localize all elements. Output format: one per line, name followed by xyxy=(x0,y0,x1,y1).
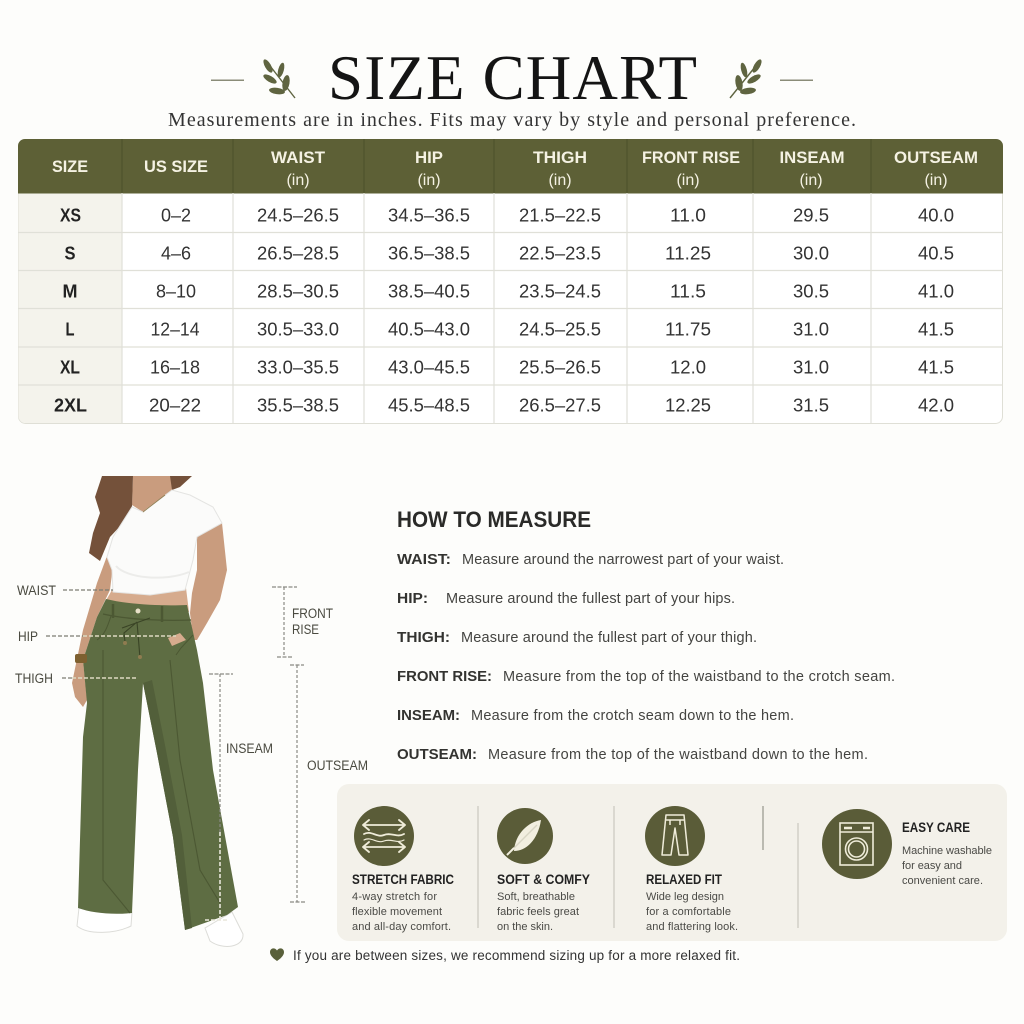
row 2XL: 45.5–48.5 xyxy=(388,396,470,416)
row XL: 25.5–26.5 xyxy=(519,358,601,378)
table header row: (in) xyxy=(676,172,700,189)
skin: neck xyxy=(132,476,173,512)
how to measure list xyxy=(397,551,895,763)
inseam bracket xyxy=(205,674,233,920)
table header row: OUTSEAM xyxy=(894,148,978,167)
row L: 24.5–25.5 xyxy=(519,320,601,340)
feature: easy care: Machine washable xyxy=(902,845,992,857)
row XS: 0–2 xyxy=(161,206,191,226)
decoration: right leaf sprig xyxy=(730,58,813,98)
row L: L xyxy=(66,320,74,340)
row XS: 21.5–22.5 xyxy=(519,206,601,226)
inseam instruction: INSEAM: xyxy=(397,707,460,724)
row S: 4–6 xyxy=(161,244,191,264)
row S: 30.0 xyxy=(793,244,829,264)
feature: relaxed fit: and flattering look. xyxy=(646,921,738,933)
row M xyxy=(62,282,954,302)
drawstring xyxy=(122,618,150,658)
table header row: HIP xyxy=(415,148,443,167)
title: SIZE CHART xyxy=(328,43,697,113)
row 2XL: 31.5 xyxy=(793,396,829,416)
feature: stretch fabric: 4-way stretch for xyxy=(352,891,437,903)
left shoe xyxy=(77,908,132,932)
pants xyxy=(78,599,238,930)
row XS: 34.5–36.5 xyxy=(388,206,470,226)
row XL xyxy=(60,358,954,378)
row 2XL: 12.25 xyxy=(665,396,711,416)
right shoe xyxy=(205,912,243,946)
table header row: INSEAM xyxy=(780,148,844,167)
feature: easy care: for easy and xyxy=(902,860,962,872)
row XL: 41.5 xyxy=(918,358,954,378)
row XS: 11.0 xyxy=(670,206,706,226)
row 2XL xyxy=(54,396,954,416)
feature: relaxed fit: RELAXED FIT xyxy=(646,872,723,887)
decoration: left leaf sprig xyxy=(211,58,295,98)
outseam instruction: Measure from the top of the waistband down to the hem. xyxy=(488,747,868,763)
row 2XL: 35.5–38.5 xyxy=(257,396,339,416)
row S: 40.5 xyxy=(918,244,954,264)
feature: easy care: convenient care. xyxy=(902,875,983,887)
feature: soft and comfy: Soft, breathable xyxy=(497,891,575,903)
table header row: THIGH xyxy=(533,148,587,167)
row L: 41.5 xyxy=(918,320,954,340)
feature: stretch fabric: and all-day comfort. xyxy=(352,921,451,933)
table header row: (in) xyxy=(286,172,310,189)
row M: 8–10 xyxy=(156,282,196,302)
row XS: 29.5 xyxy=(793,206,829,226)
feature: soft and comfy: SOFT & COMFY xyxy=(497,872,590,887)
feature: stretch fabric: STRETCH FABRIC xyxy=(352,872,454,887)
row 2XL: 2XL xyxy=(54,396,87,416)
row L: 12–14 xyxy=(150,320,200,340)
belt loops xyxy=(113,604,162,622)
row XL: 31.0 xyxy=(793,358,829,378)
model illustration wearing green wide-leg pants xyxy=(72,476,243,946)
row L: 31.0 xyxy=(793,320,829,340)
feature: relaxed fit xyxy=(645,806,738,933)
label: front rise: RISE xyxy=(292,622,319,637)
feature: soft and comfy: on the skin. xyxy=(497,921,553,933)
thigh instruction: THIGH: xyxy=(397,629,450,646)
label: waist: WAIST xyxy=(17,583,56,598)
row S: 36.5–38.5 xyxy=(388,244,470,264)
table header row: WAIST xyxy=(271,148,326,167)
hand in pocket xyxy=(168,633,186,646)
row M: 30.5 xyxy=(793,282,829,302)
outseam instruction: OUTSEAM: xyxy=(397,746,477,763)
row M: M xyxy=(62,282,78,302)
front rise instruction: Measure from the top of the waistband to the crotch seam. xyxy=(503,669,895,685)
row XL: 16–18 xyxy=(150,358,200,378)
row S: S xyxy=(64,244,76,264)
table header row: (in) xyxy=(548,172,572,189)
feature: relaxed fit: for a comfortable xyxy=(646,906,731,918)
row M: 38.5–40.5 xyxy=(388,282,470,302)
thigh instruction: Measure around the fullest part of your thigh. xyxy=(461,630,757,646)
label: outseam: OUTSEAM xyxy=(307,758,368,773)
label: inseam: INSEAM xyxy=(226,741,273,756)
front rise bracket xyxy=(272,587,297,657)
row S: 22.5–23.5 xyxy=(519,244,601,264)
outseam bracket xyxy=(290,665,305,902)
feature: relaxed fit: Wide leg design xyxy=(646,891,724,903)
panel: fabric features xyxy=(337,784,1007,941)
skin: midriff xyxy=(105,588,189,612)
feature: soft and comfy: fabric feels great xyxy=(497,906,579,918)
feature: easy care xyxy=(822,809,992,887)
hip instruction: Measure around the fullest part of your hips. xyxy=(446,591,735,607)
row XL: 43.0–45.5 xyxy=(388,358,470,378)
shirt xyxy=(107,490,222,595)
row XS: 40.0 xyxy=(918,206,954,226)
skin: right arm xyxy=(168,523,227,646)
row XL: XL xyxy=(60,358,80,378)
table header row: (in) xyxy=(417,172,441,189)
feature: easy care: EASY CARE xyxy=(902,820,970,835)
row L: 30.5–33.0 xyxy=(257,320,339,340)
row XS: XS xyxy=(60,206,81,226)
row L xyxy=(66,320,954,340)
table header row: US SIZE xyxy=(144,157,208,176)
table header row: SIZE xyxy=(52,157,88,176)
row XS xyxy=(60,206,954,226)
feature: stretch fabric xyxy=(352,806,454,933)
bracelets xyxy=(75,654,87,663)
front rise instruction: FRONT RISE: xyxy=(397,668,492,685)
row M: 23.5–24.5 xyxy=(519,282,601,302)
row 2XL: 26.5–27.5 xyxy=(519,396,601,416)
feature: soft and comfy xyxy=(497,808,590,933)
table header row: (in) xyxy=(924,172,948,189)
body measure guides xyxy=(46,590,176,678)
row M: 11.5 xyxy=(670,282,706,302)
hair xyxy=(89,476,192,561)
table header row: FRONT RISE xyxy=(642,148,740,167)
label: hip: HIP xyxy=(18,629,38,644)
label: front rise: FRONT xyxy=(292,606,333,621)
row S xyxy=(64,244,954,264)
how to measure heading: HOW TO MEASURE xyxy=(397,507,591,532)
row XL: 33.0–35.5 xyxy=(257,358,339,378)
row L: 11.75 xyxy=(665,320,711,340)
subtitle: Measurements are in inches. Fits may vary by style and personal preference. xyxy=(168,109,856,131)
label: front rise xyxy=(292,606,333,637)
footer note: If you are between sizes, we recommend sizing up for a more relaxed fit. xyxy=(293,948,740,963)
row S: 11.25 xyxy=(665,244,711,264)
label: thigh: THIGH xyxy=(15,671,53,686)
row S: 26.5–28.5 xyxy=(257,244,339,264)
table header row: (in) xyxy=(799,172,823,189)
waist instruction: WAIST: xyxy=(397,551,451,568)
necklace xyxy=(143,495,165,512)
inseam instruction: Measure from the crotch seam down to the hem. xyxy=(471,708,794,724)
waist instruction: Measure around the narrowest part of your waist. xyxy=(462,552,784,568)
row L: 40.5–43.0 xyxy=(388,320,470,340)
row XL: 12.0 xyxy=(670,358,706,378)
row M: 41.0 xyxy=(918,282,954,302)
hip instruction: HIP: xyxy=(397,590,428,607)
row XS: 24.5–26.5 xyxy=(257,206,339,226)
feature: stretch fabric: flexible movement xyxy=(352,906,442,918)
row 2XL: 20–22 xyxy=(149,396,201,416)
row 2XL: 42.0 xyxy=(918,396,954,416)
skin: left arm xyxy=(72,556,113,707)
size table xyxy=(18,139,1003,424)
row M: 28.5–30.5 xyxy=(257,282,339,302)
icon: heart xyxy=(270,948,284,961)
table header row xyxy=(52,148,978,189)
